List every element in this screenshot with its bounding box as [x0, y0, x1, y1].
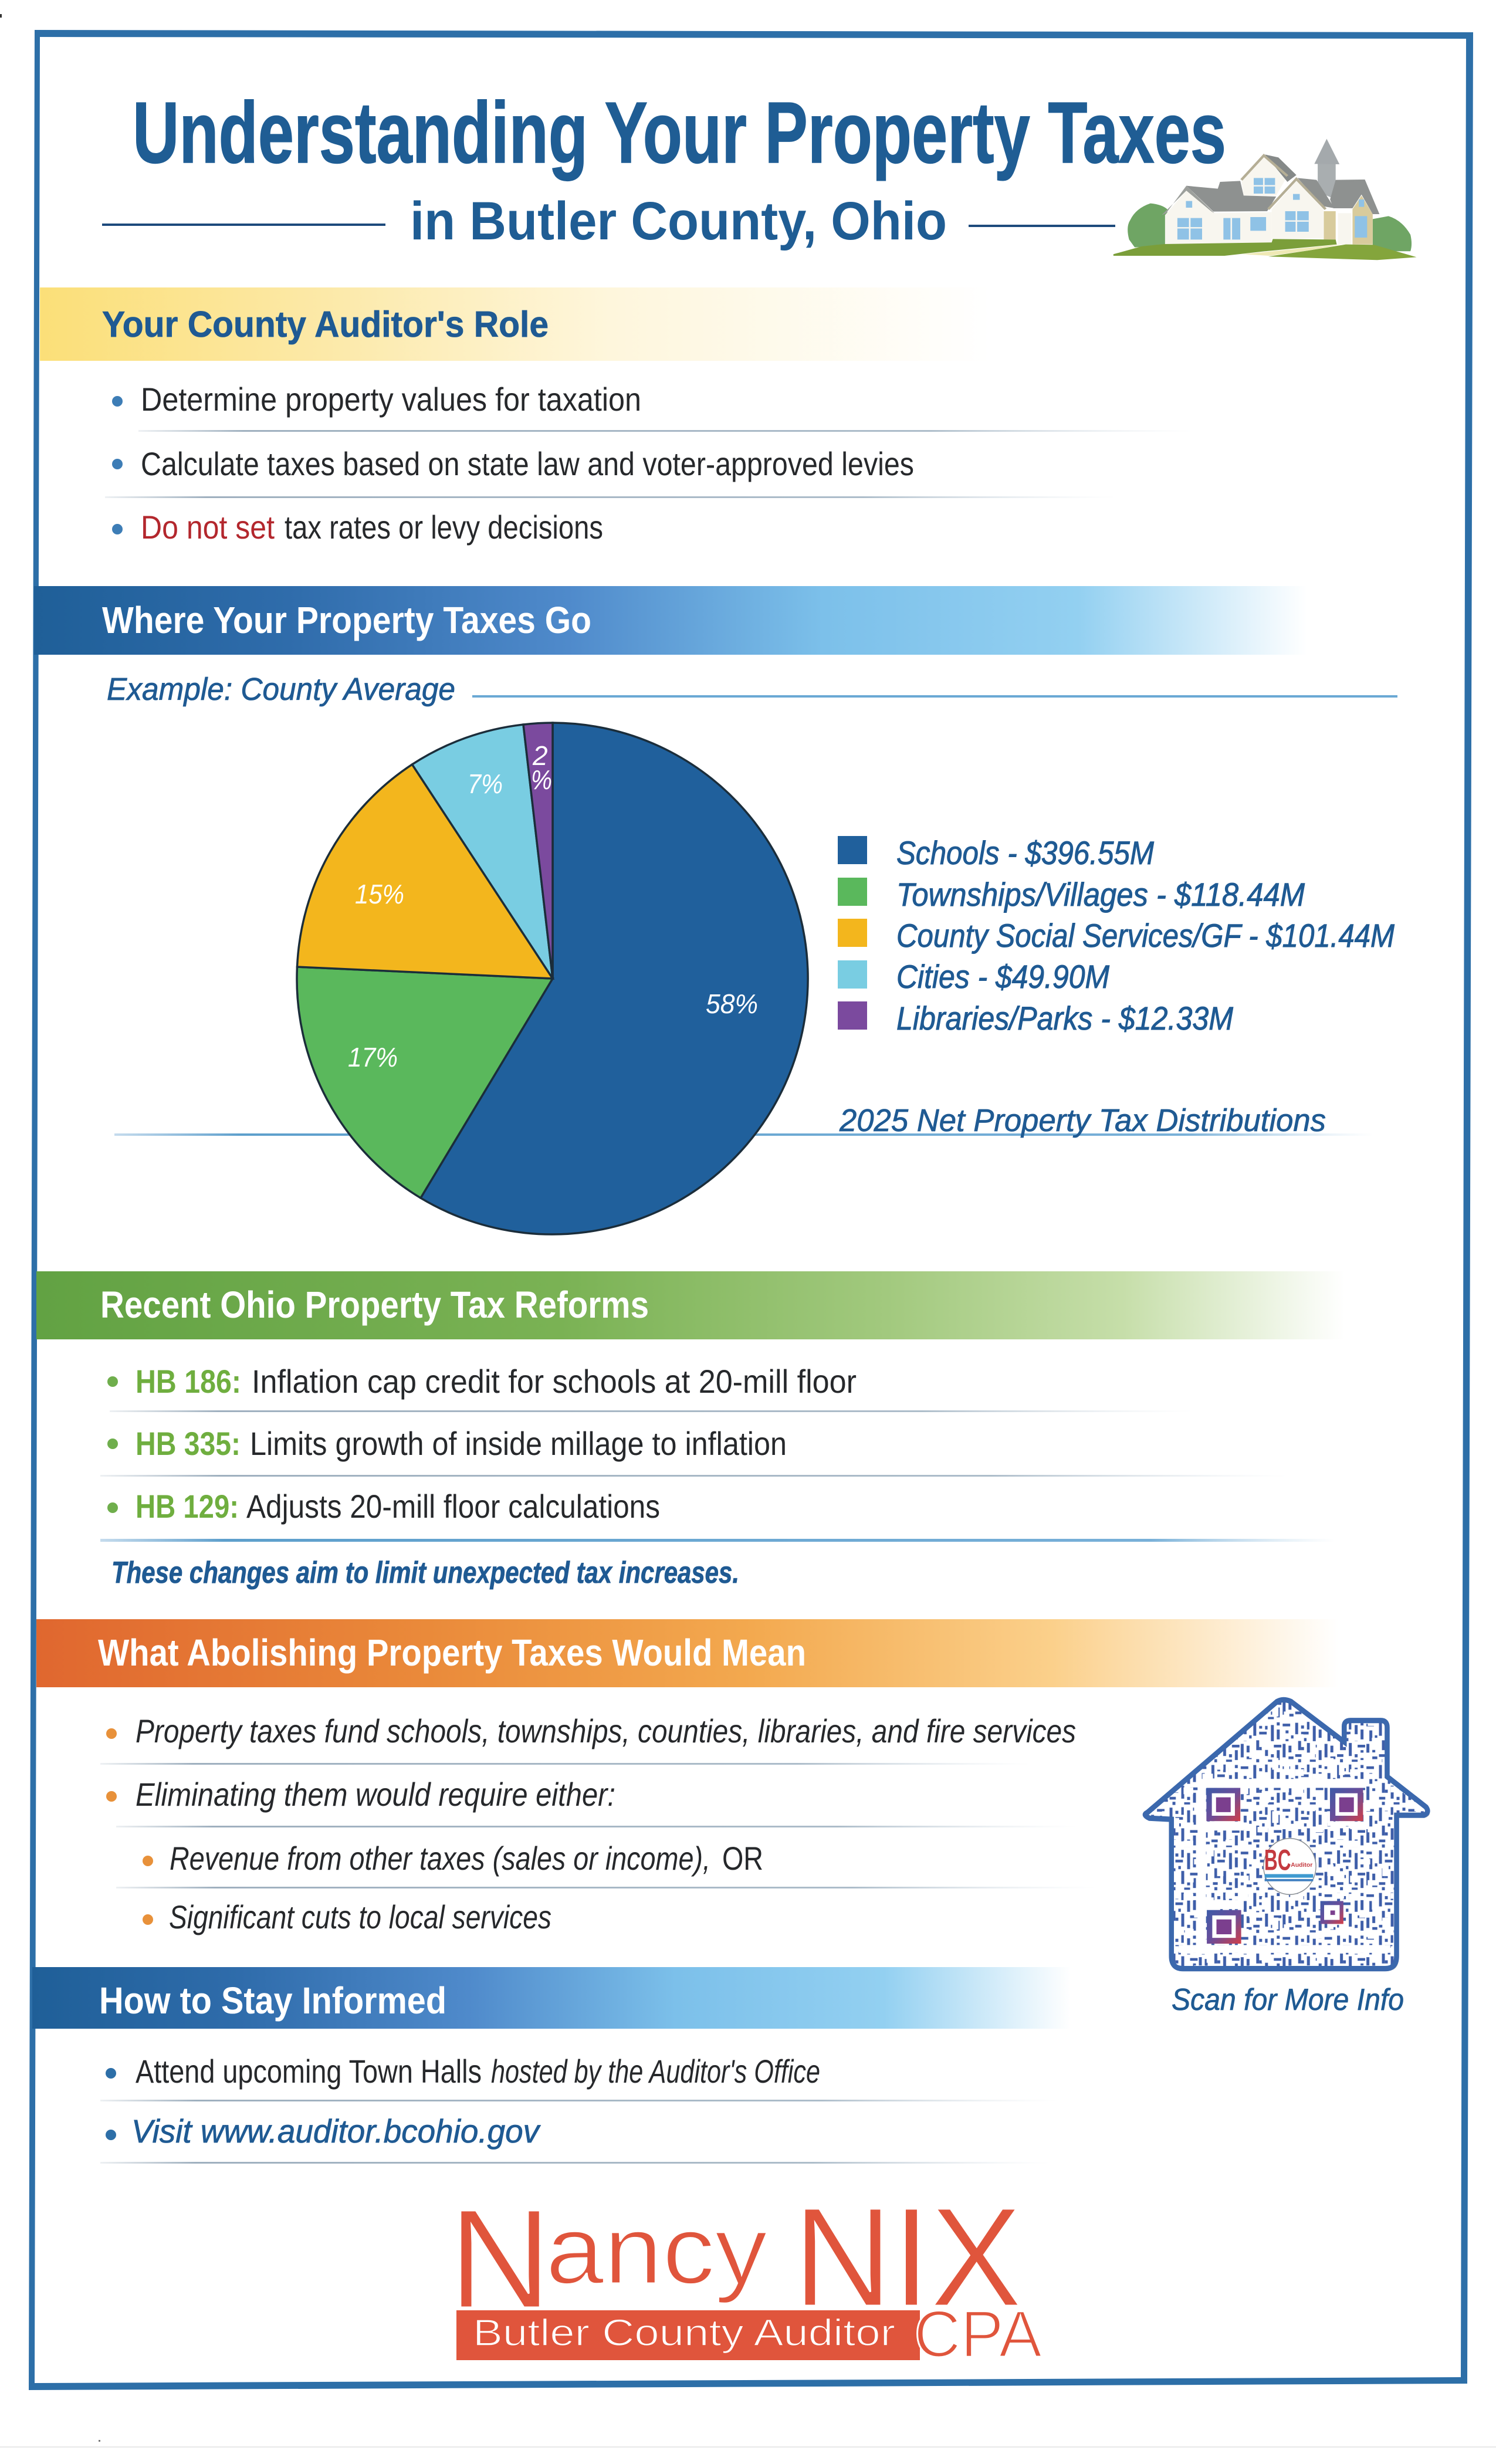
heading: Recent Ohio Property Tax Reforms [100, 1284, 649, 1326]
section band [34, 586, 1307, 655]
row divider [100, 1763, 1030, 1765]
subtitle rule left [102, 224, 385, 226]
subtitle rule right [969, 225, 1115, 227]
bullet text: Property taxes fund schools, townships, counties, libraries, and fire services [136, 1712, 1076, 1749]
bullet dot 2 [112, 459, 123, 469]
row divider [116, 1826, 1078, 1827]
bullet text 2: Calculate taxes based on state law and voter-approved levies [141, 445, 914, 482]
pie label 2%: 2 [532, 740, 548, 771]
legend text libraries: Libraries/Parks - $12.33M [896, 1000, 1233, 1037]
closing note: These changes aim to limit unexpected tax increases. [111, 1556, 739, 1590]
scan mark bottom [99, 2440, 100, 2442]
example rule [472, 695, 1397, 698]
bullet dot 3 [112, 524, 123, 534]
slice: county social services [297, 764, 553, 979]
town hall text: Attend upcoming Town Halls [136, 2053, 482, 2090]
bullet dot [107, 1502, 118, 1513]
bullet dot [107, 1376, 118, 1387]
section band [40, 287, 990, 361]
legend [838, 834, 1395, 1037]
legend swatch cities [838, 960, 867, 989]
slice: cities [412, 725, 553, 979]
bill description: Inflation cap credit for schools at 20-mill floor [252, 1363, 857, 1400]
row divider [138, 430, 1192, 432]
heading: What Abolishing Property Taxes Would Mean [98, 1632, 806, 1674]
row divider [110, 1410, 1193, 1412]
row divider [116, 1887, 1097, 1888]
row divider [100, 1475, 1288, 1477]
logo band [456, 2310, 920, 2360]
website link text: Visit www.auditor.bcohio.gov [131, 2113, 541, 2150]
logo ancy: ancy [546, 2196, 768, 2304]
title block [102, 84, 1226, 251]
icon: house illustration [1113, 139, 1416, 260]
pie label 15%: 15% [355, 879, 404, 909]
bullet text 3: tax rates or levy decisions [285, 509, 603, 546]
legend text cities: Cities - $49.90M [896, 958, 1109, 995]
chart caption: 2025 Net Property Tax Distributions [839, 1103, 1326, 1138]
bill label HB 186: HB 186: [136, 1363, 241, 1400]
alignment square [1321, 1901, 1343, 1924]
slice: libraries [523, 723, 553, 979]
pie label 17%: 17% [348, 1042, 398, 1072]
panel: how to stay informed [32, 1967, 1071, 2164]
heading: Where Your Property Taxes Go [102, 599, 591, 641]
slice: townships [297, 967, 553, 1198]
town hall text italic: hosted by the Auditor's Office [491, 2053, 820, 2090]
bullet dot [106, 2068, 116, 2079]
QR caption: Scan for More Info [1172, 1983, 1404, 2017]
legend text townships: Townships/Villages - $118.44M [896, 876, 1305, 913]
example label: Example: County Average [107, 672, 455, 707]
heading: Your County Auditor's Role [102, 304, 549, 345]
closing rule [100, 1539, 1335, 1542]
bullet dot [106, 2130, 116, 2140]
finder square top left [1206, 1788, 1240, 1821]
logo: Nancy Nix, Butler County Auditor, CPA [449, 2178, 1042, 2371]
logo band text: Butler County Auditor [473, 2311, 895, 2354]
heading: How to Stay Informed [99, 1979, 446, 2022]
logo CPA: CPA [914, 2297, 1042, 2371]
sub-bullet dot [143, 1914, 153, 1925]
bullet text 1: Determine property values for taxation [141, 381, 641, 418]
panel: where your property taxes go [34, 586, 1397, 1234]
QR logo [1264, 1839, 1316, 1894]
row divider [100, 2100, 1059, 2101]
bullet text: Eliminating them would require either: [136, 1776, 615, 1813]
panel: what abolishing property taxes would mean [36, 1619, 1339, 1935]
pie label 7%: 7% [468, 769, 503, 799]
bullet dot [106, 1791, 117, 1802]
logo N: N [449, 2180, 551, 2337]
bill label HB 129: HB 129: [136, 1488, 239, 1525]
OR emphasis: OR [722, 1840, 763, 1877]
legend swatch libraries [838, 1001, 867, 1030]
pie label 2%: % [531, 764, 552, 795]
bill description: Limits growth of inside millage to inflation [250, 1425, 787, 1462]
scan mark top left [0, 14, 2, 18]
distribution rule [114, 1133, 1373, 1136]
legend text county: County Social Services/GF - $101.44M [896, 917, 1395, 954]
pie label 2% [531, 740, 552, 795]
pie label 58%: 58% [706, 989, 758, 1019]
finder square bottom left [1207, 1910, 1241, 1944]
panel: recent ohio property tax reforms [36, 1271, 1345, 1590]
slice: schools [421, 723, 808, 1234]
legend swatch schools [838, 836, 867, 864]
bill description: Adjusts 20-mill floor calculations [246, 1488, 660, 1525]
QR logo: BC [1264, 1844, 1291, 1877]
sub-bullet dot [143, 1856, 153, 1866]
subtitle: in Butler County, Ohio [410, 191, 947, 251]
row divider [105, 496, 1116, 498]
panel: county auditor's role [40, 287, 1192, 546]
section band [32, 1967, 1071, 2029]
section band [36, 1619, 1339, 1687]
legend swatch county [838, 919, 867, 947]
bullet dot 1 [112, 396, 123, 407]
legend text schools: Schools - $396.55M [896, 834, 1154, 871]
QR logo: Auditor [1291, 1862, 1313, 1869]
row divider [100, 2162, 1050, 2164]
faint scan edge line [0, 2446, 1496, 2448]
QR code: house shaped [1143, 1697, 1430, 1971]
bullet dot [107, 1439, 118, 1449]
finder square top right [1330, 1788, 1363, 1821]
sub-bullet text: Revenue from other taxes (sales or income), [170, 1840, 710, 1877]
red emphasis text: Do not set [141, 509, 275, 546]
logo NIX: NIX [793, 2178, 1022, 2336]
sub-bullet text: Significant cuts to local services [169, 1898, 551, 1935]
legend swatch townships [838, 878, 867, 906]
bill label HB 335: HB 335: [136, 1425, 241, 1462]
bullet dot [106, 1728, 117, 1739]
section band [36, 1271, 1345, 1339]
pie chart [297, 723, 808, 1234]
